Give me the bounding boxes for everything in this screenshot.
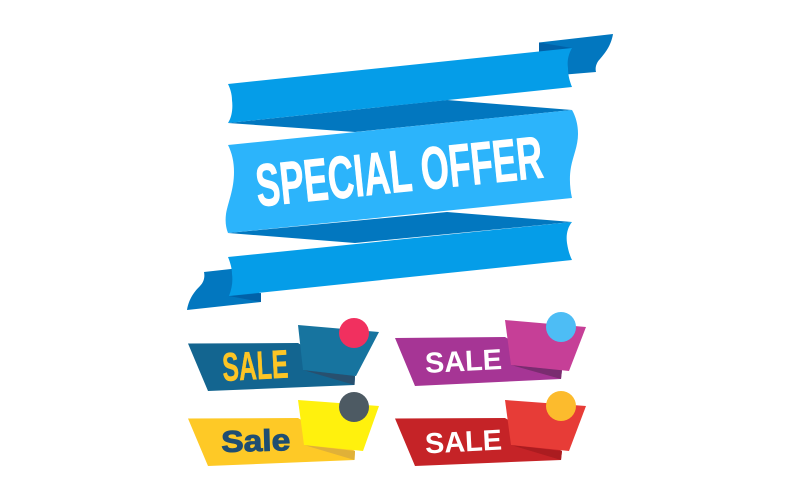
ribbon tail: bottom left: [187, 268, 261, 310]
sale badge: red: [395, 391, 586, 466]
sale badge dot: [546, 391, 576, 421]
ribbon band: top: [228, 48, 572, 123]
sale badge dot: [546, 312, 576, 342]
sale badge dot: [339, 392, 369, 422]
sale badge: purple: [395, 312, 586, 386]
sale badge dot: [339, 318, 369, 348]
ribbon fold: lower: [228, 212, 572, 243]
ribbon band: bottom: [228, 222, 572, 296]
sale badge: yellow: [188, 392, 379, 466]
ribbon tail: top right: [539, 34, 613, 75]
ribbon fold: upper: [228, 100, 572, 132]
sale badge text: Sale: [221, 424, 291, 459]
sale badge text: SALE: [424, 344, 503, 380]
sale badge: teal: [188, 318, 379, 391]
ribbon banner: [187, 34, 613, 310]
sale badge text: SALE: [221, 343, 289, 390]
ribbon band: middle: [226, 110, 578, 233]
sale badge text: SALE: [424, 425, 503, 460]
title: special offer: SPECIAL OFFER: [253, 124, 546, 219]
